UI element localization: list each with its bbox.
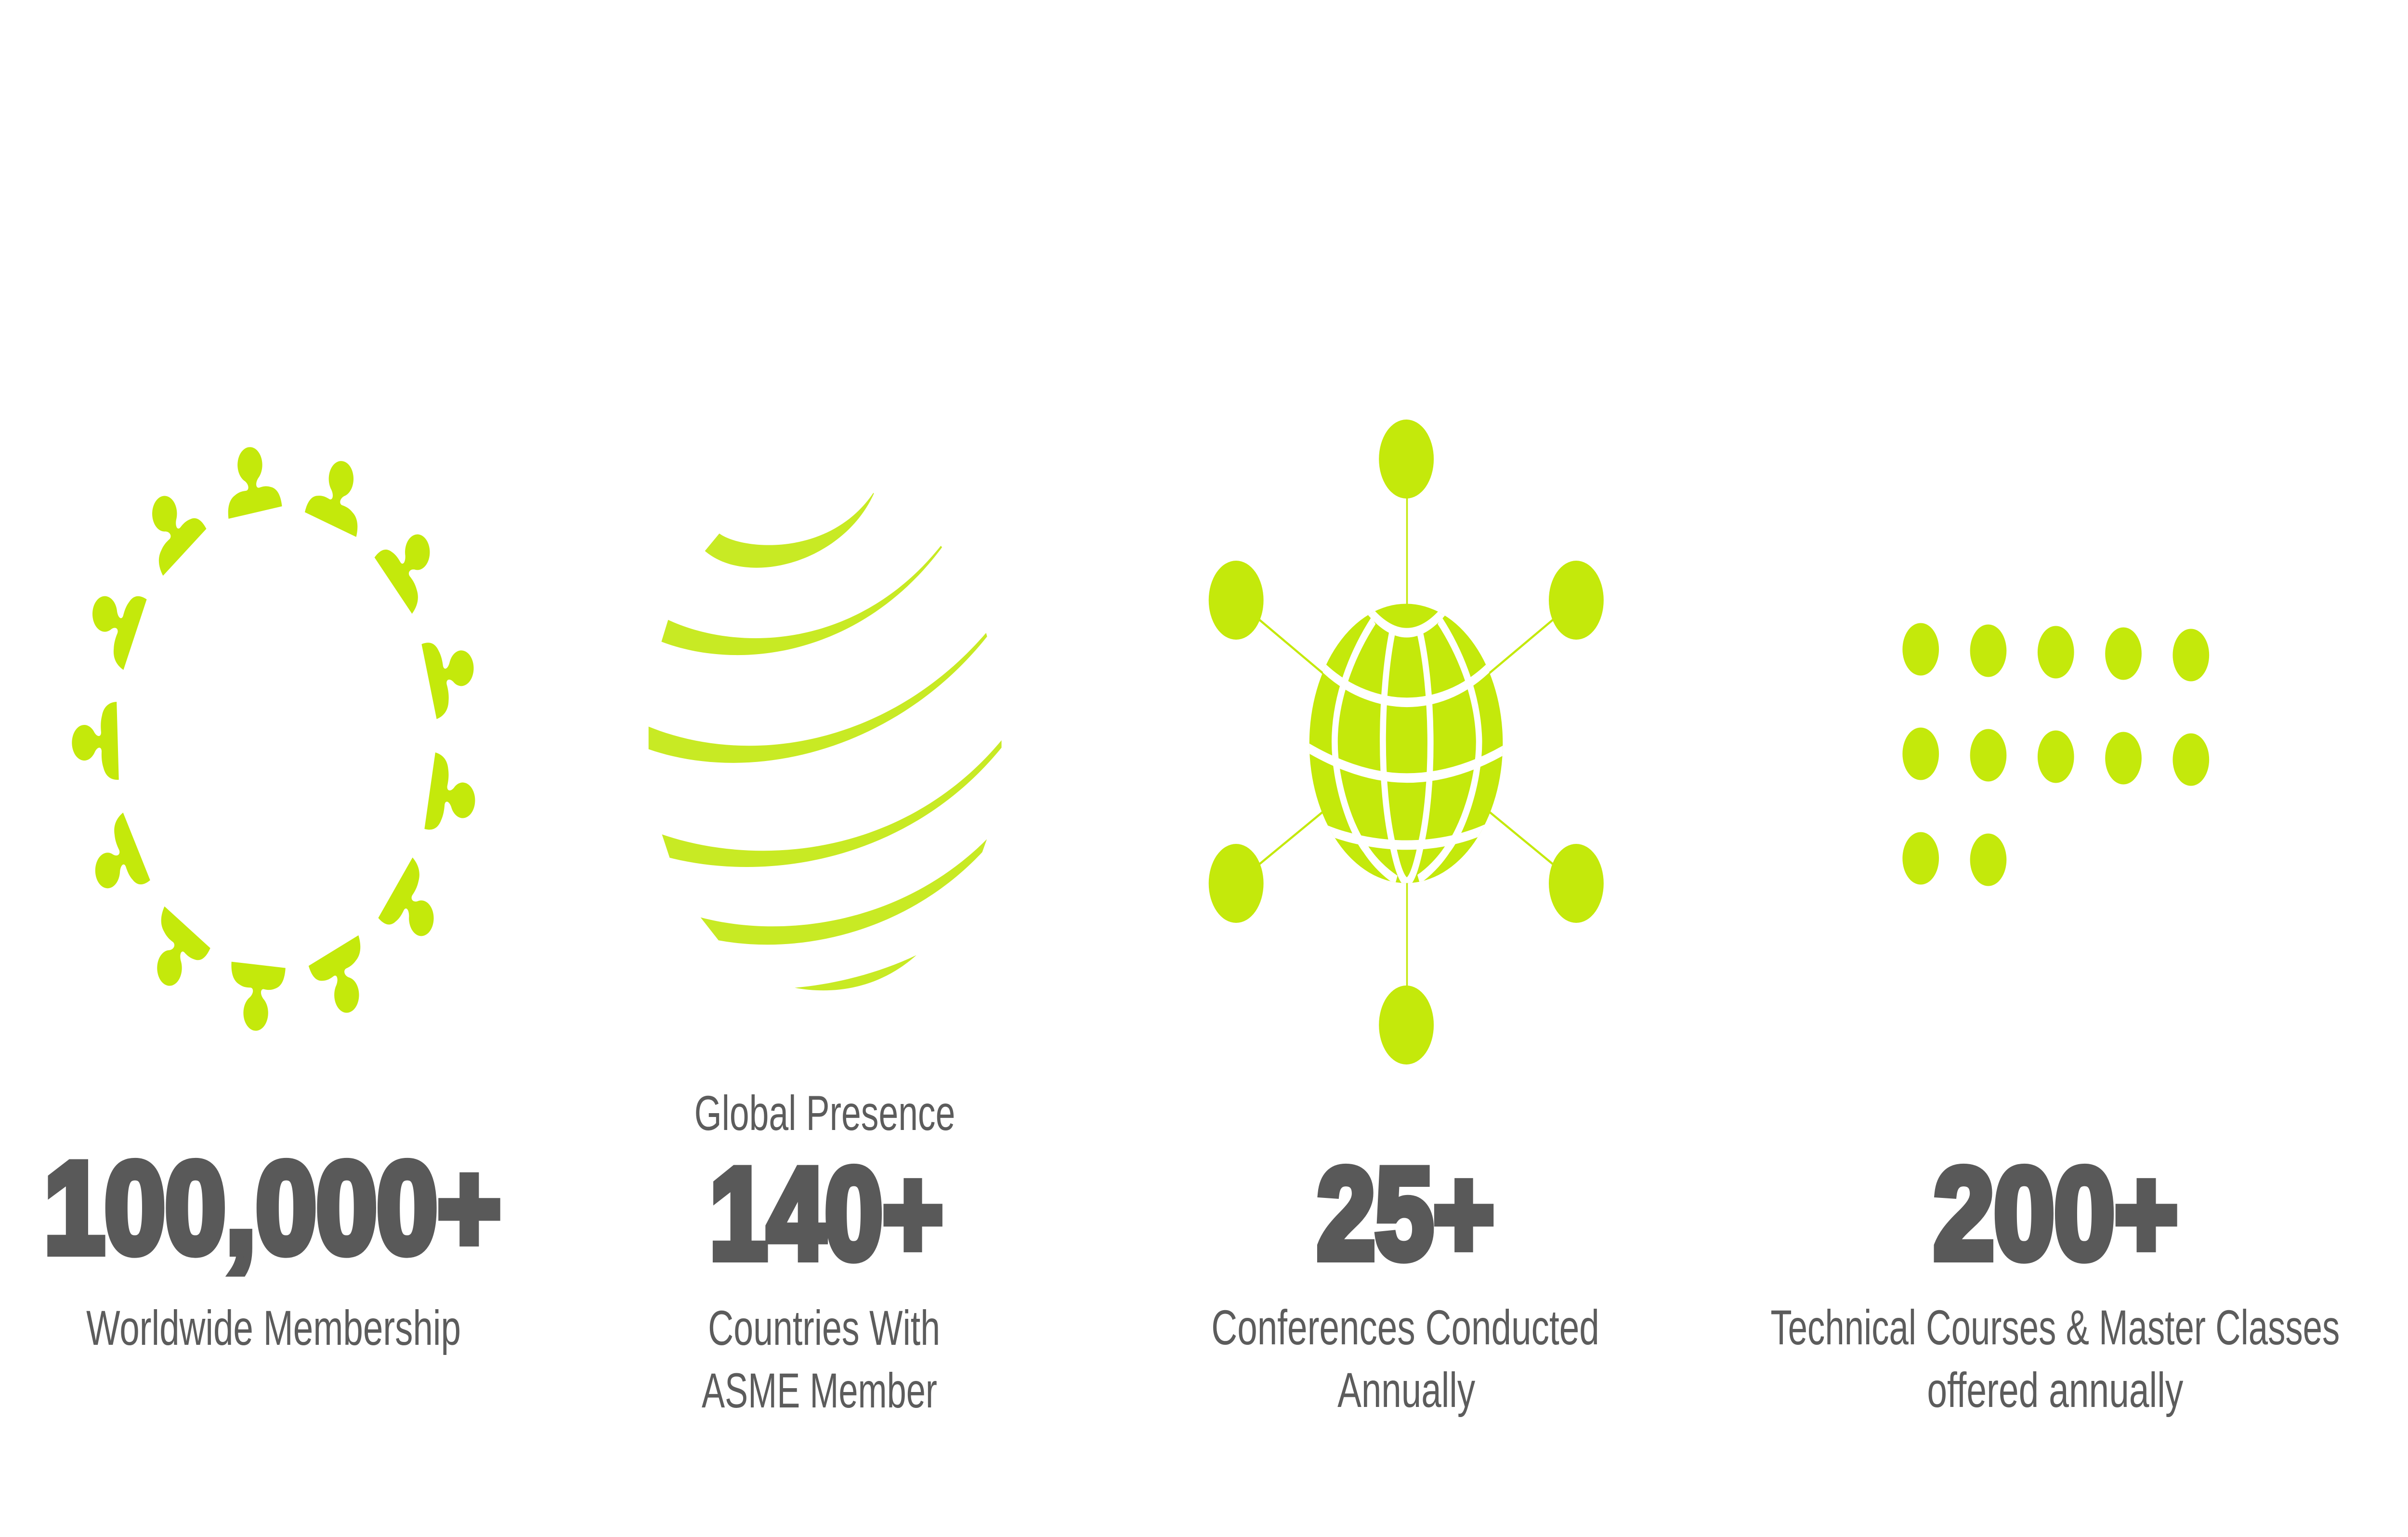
number: 140+: 140+ (710, 1141, 943, 1286)
icon: dot grid (1902, 623, 2209, 886)
heading: global presence: Global Presence (694, 1086, 955, 1141)
icon: ring of people (71, 441, 481, 1034)
number: 100,000+: 100,000+ (44, 1135, 501, 1280)
label: worldwide membership: Worldwide Membership (86, 1301, 461, 1355)
number: 200+: 200+ (1934, 1141, 2178, 1286)
label: annually: Annually (1337, 1363, 1475, 1418)
icon: connector lines (1236, 459, 1576, 1025)
icon: striped globe (649, 493, 1002, 990)
label: offered annually: offered annually (1927, 1363, 2183, 1418)
icon: satellite dots (1209, 420, 1604, 1064)
label: conferences conducted: Conferences Conducted (1211, 1300, 1599, 1355)
panel: technical courses (1770, 623, 2340, 1418)
panel: worldwide membership (44, 441, 501, 1355)
panel: global presence (649, 493, 1002, 1418)
panel: conferences (1209, 420, 1604, 1418)
label: second line: ASME Member (702, 1363, 937, 1418)
label: technical courses and master classes: Technical Courses & Master Classes (1770, 1300, 2340, 1355)
number: 25+: 25+ (1317, 1141, 1494, 1286)
icon: central globe (1306, 604, 1506, 883)
label: countries with ASME member: Countries With (708, 1301, 940, 1355)
